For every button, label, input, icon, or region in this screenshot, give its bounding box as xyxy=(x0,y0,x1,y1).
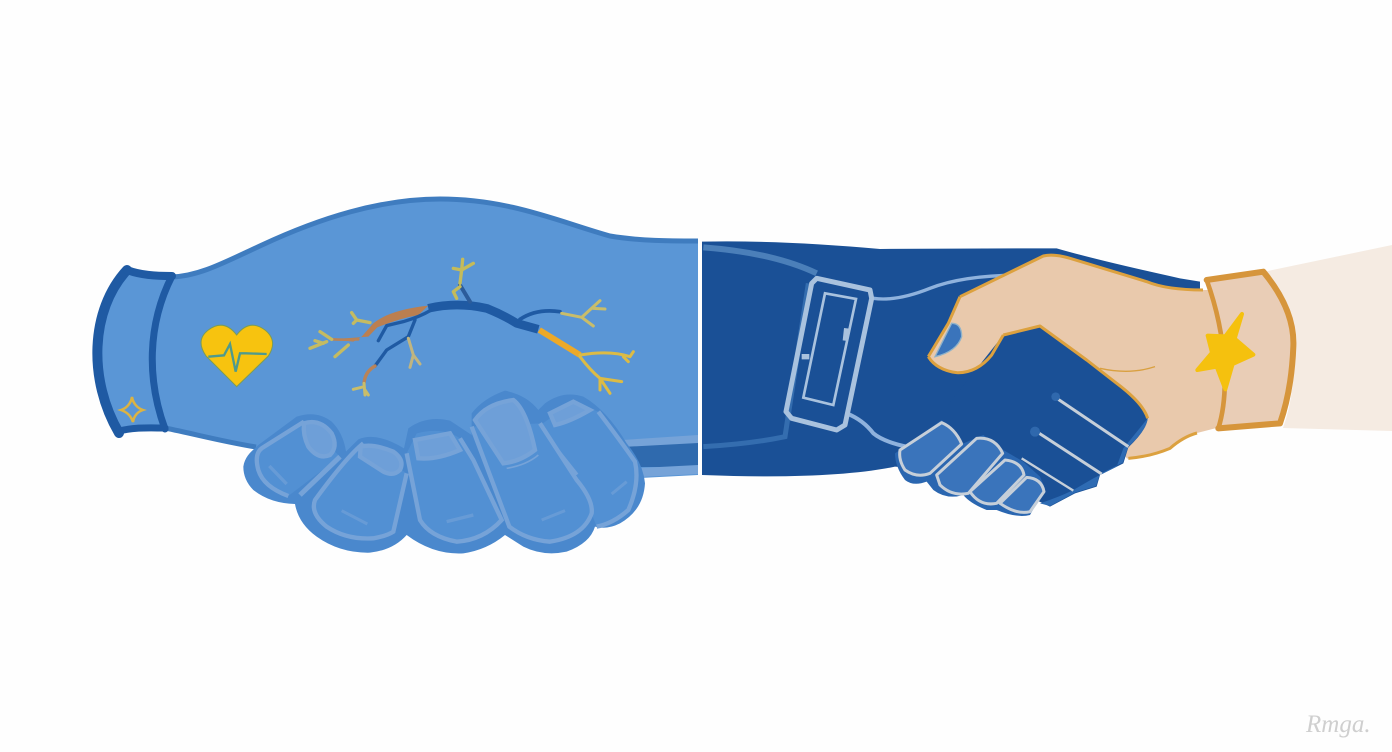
left arm: sleeve xyxy=(155,199,698,478)
finger 3 xyxy=(407,431,502,542)
icon: heart with pulse xyxy=(201,325,273,387)
right fingers of blue hand xyxy=(895,392,1128,516)
sleeve top edge xyxy=(172,199,698,277)
wrist strap and sleeve seams xyxy=(703,247,1023,447)
finger third xyxy=(970,460,1024,504)
sleeve seam bottom xyxy=(703,283,808,447)
finger 1 xyxy=(257,422,340,496)
palm crease xyxy=(1100,367,1155,371)
buckle tabs xyxy=(802,328,847,357)
left hand fingers xyxy=(243,391,645,553)
finger top xyxy=(900,423,1044,512)
skin cuff xyxy=(1197,272,1293,428)
blue hand lower edge xyxy=(1040,418,1148,506)
finger fourth xyxy=(1000,477,1044,512)
branching nerve tree xyxy=(310,259,633,395)
sleeve body xyxy=(155,199,698,478)
finger 2 xyxy=(314,443,407,539)
finger 4 xyxy=(472,400,592,542)
sleeve seam top xyxy=(703,247,817,273)
handshake: skin hand and blue palm xyxy=(928,255,1227,507)
right arm: dark blue sleeve xyxy=(702,241,1200,476)
centre divider xyxy=(698,241,702,475)
lower fingers base xyxy=(895,420,1045,516)
left arm: cuff xyxy=(97,270,172,433)
hand silhouette xyxy=(243,391,645,553)
lower branches xyxy=(364,366,375,383)
icon: sparkle xyxy=(121,397,143,422)
knuckle dots xyxy=(1030,392,1060,437)
pale forearm xyxy=(1263,245,1392,431)
finger 5 xyxy=(538,402,636,527)
buckle outer xyxy=(786,278,872,430)
buckle inner xyxy=(803,293,856,405)
blue palm xyxy=(947,326,1148,507)
skin hand xyxy=(928,255,1227,459)
sleeve bands near wrist xyxy=(622,435,698,477)
strap line upper xyxy=(873,275,1023,299)
gold tips left xyxy=(310,313,370,357)
blue main trunk xyxy=(428,305,538,329)
skin outline xyxy=(928,255,1203,458)
strap line lower xyxy=(847,413,907,447)
thumbnail xyxy=(935,323,962,357)
finger second xyxy=(937,438,1003,494)
finger gap lines xyxy=(1022,399,1128,491)
gold branch right xyxy=(539,330,580,355)
gold tips top xyxy=(453,259,473,298)
sleeve bottom edge xyxy=(165,428,256,447)
icon: star xyxy=(1197,314,1253,389)
brown branch left xyxy=(332,306,428,342)
watermark: Rmga. xyxy=(1305,711,1371,738)
